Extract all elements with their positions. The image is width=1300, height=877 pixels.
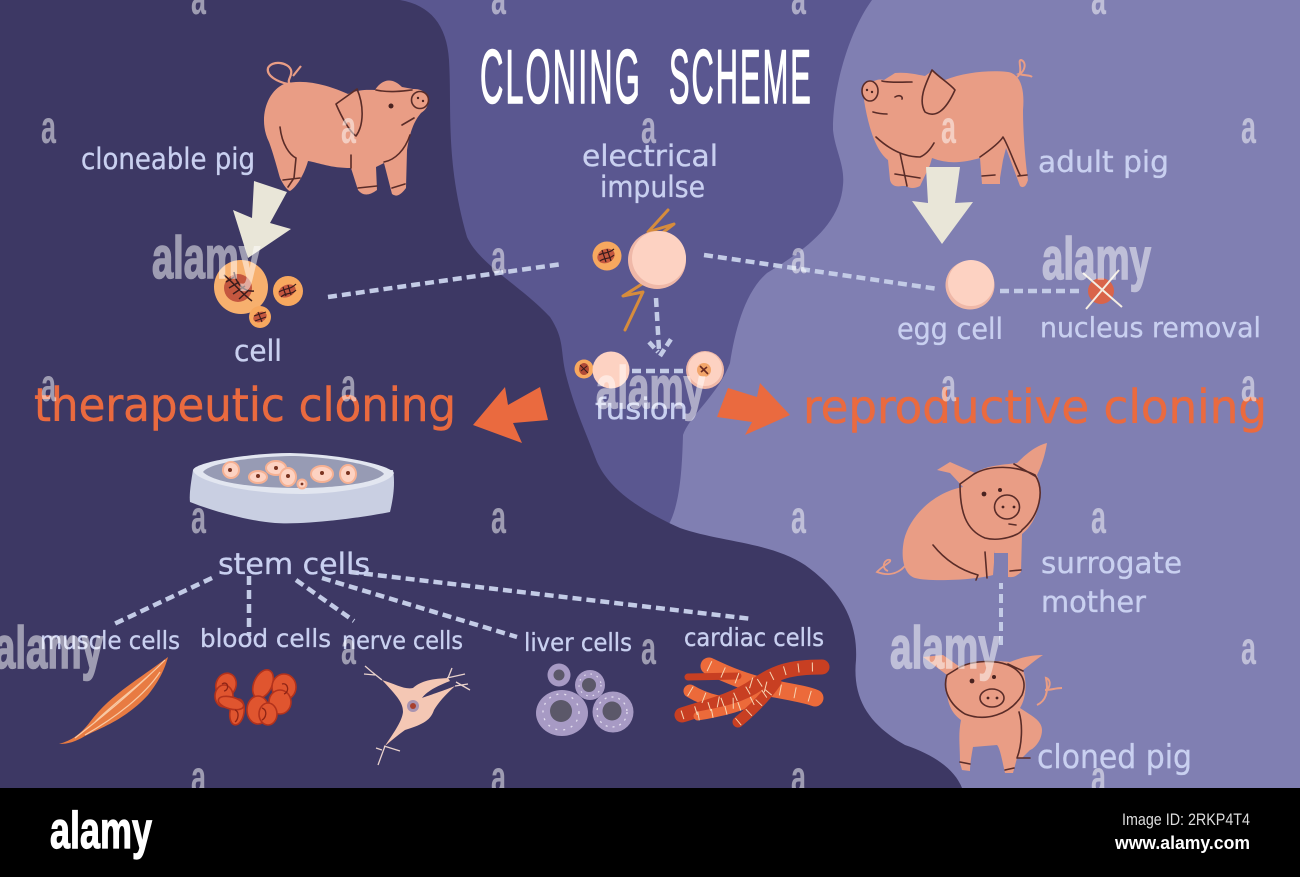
dashed connector: cell to impulse bbox=[328, 264, 562, 297]
watermark: small repeated marks: a bbox=[1241, 359, 1256, 411]
watermark: small repeated marks: a bbox=[791, 751, 806, 803]
icon: muscle cell bbox=[59, 657, 168, 744]
arrow: to reproductive cloning bbox=[717, 383, 790, 435]
background: dark left panel bbox=[0, 0, 962, 788]
footer url: www.alamy.com bbox=[1114, 833, 1250, 853]
icon: nerve cell bbox=[364, 666, 470, 765]
label: muscle cells: muscle cells bbox=[40, 626, 180, 655]
footer bar bbox=[0, 788, 1300, 877]
arrow: adult pig to egg cell bbox=[912, 167, 973, 244]
footer logo: alamy bbox=[50, 802, 152, 860]
dashed connectors: stem cells branches bbox=[112, 572, 752, 637]
icon: electrical bolt bbox=[623, 210, 674, 330]
dashed arrow: impulse to fusion bbox=[649, 298, 673, 356]
watermark: small repeated marks: a bbox=[41, 101, 56, 153]
icon: large egg cell bbox=[628, 231, 686, 289]
label: nucleus removal: nucleus removal bbox=[1040, 311, 1261, 344]
title bbox=[480, 35, 813, 120]
label: blood cells: blood cells bbox=[200, 624, 331, 653]
dashed connector: fusion cells bbox=[632, 369, 684, 373]
dashed connector: egg cell to nucleus bbox=[1000, 289, 1082, 293]
watermark: small repeated marks: a bbox=[1241, 622, 1256, 674]
icon: fusion cells bbox=[574, 351, 724, 389]
icon: nucleus removal bbox=[1083, 270, 1122, 309]
watermark: small repeated marks: a bbox=[191, 491, 206, 543]
watermark: small repeated marks: a bbox=[41, 359, 56, 411]
watermark: small repeated marks: a bbox=[791, 491, 806, 543]
watermark: small repeated marks: a bbox=[941, 101, 956, 153]
icon: nucleus cell beside impulse bbox=[592, 242, 622, 270]
icon: cloned pig bbox=[923, 655, 1062, 773]
arrow: to therapeutic cloning bbox=[473, 387, 548, 443]
title: SCHEME bbox=[669, 36, 813, 120]
label: egg cell: egg cell bbox=[897, 312, 1003, 346]
icon: surrogate mother pig bbox=[877, 443, 1047, 583]
icon: liver cells bbox=[536, 664, 634, 736]
background: middle panel bbox=[400, 0, 872, 530]
arrow: pig to cell bbox=[233, 181, 291, 258]
label: adult pig: adult pig bbox=[1038, 145, 1169, 179]
watermark: small repeated marks: a bbox=[341, 101, 356, 153]
label: cloneable pig: cloneable pig bbox=[81, 142, 255, 176]
footer image id: Image ID: 2RKP4T4 bbox=[1122, 810, 1250, 829]
dashed connector: impulse to egg cell bbox=[704, 255, 938, 289]
watermark: small repeated marks: a bbox=[491, 231, 506, 283]
icon: cell cluster bbox=[214, 260, 303, 328]
watermark: large alamy marks: alamy bbox=[890, 615, 1000, 681]
icon: petri dish bbox=[190, 453, 394, 523]
heading: therapeutic cloning: therapeutic cloning bbox=[34, 378, 456, 432]
watermark: small repeated marks: a bbox=[1241, 101, 1256, 153]
label: surrogate mother: mother bbox=[1041, 585, 1146, 619]
watermark: small repeated marks: a bbox=[341, 359, 356, 411]
watermark: small repeated marks: a bbox=[491, 491, 506, 543]
icon: blood cells bbox=[212, 667, 296, 726]
watermark: large alamy marks: alamy bbox=[152, 225, 260, 291]
watermark: small repeated marks: a bbox=[191, 751, 206, 803]
icon: adult pig bbox=[862, 60, 1032, 188]
watermark: small repeated marks: a bbox=[491, 751, 506, 803]
watermark: small repeated marks: a bbox=[341, 622, 356, 674]
label: stem cells: stem cells bbox=[218, 547, 370, 581]
icon: cloneable pig bbox=[264, 63, 428, 196]
label: fusion: fusion bbox=[595, 392, 688, 426]
watermark: large alamy marks bbox=[0, 225, 1151, 681]
label: electrical: electrical bbox=[582, 139, 718, 173]
label: surrogate mother bbox=[1041, 546, 1182, 619]
label: cell: cell bbox=[234, 334, 282, 368]
watermark: small repeated marks: a bbox=[641, 622, 656, 674]
icon: egg cell bbox=[946, 260, 994, 310]
watermark: small repeated marks: a bbox=[641, 101, 656, 153]
watermark: small repeated marks: a bbox=[1091, 751, 1106, 803]
label: impulse: impulse bbox=[600, 170, 705, 204]
watermark: small repeated marks: a bbox=[1091, 491, 1106, 543]
watermark: small repeated marks: a bbox=[791, 231, 806, 283]
icon: cardiac cells bbox=[682, 666, 822, 722]
watermark: large alamy marks: alamy bbox=[596, 355, 705, 421]
label: cardiac cells: cardiac cells bbox=[684, 623, 824, 652]
label: surrogate mother: surrogate bbox=[1041, 546, 1182, 580]
dashed connector: surrogate to cloned pig bbox=[999, 580, 1003, 650]
watermark: small repeated marks: a bbox=[941, 359, 956, 411]
label: cloned pig: cloned pig bbox=[1037, 737, 1192, 776]
label: nerve cells: nerve cells bbox=[342, 626, 463, 655]
heading: reproductive cloning: reproductive cloning bbox=[803, 380, 1267, 434]
watermark: large alamy marks: alamy bbox=[1042, 226, 1151, 292]
title: CLONING bbox=[480, 35, 642, 120]
label: liver cells: liver cells bbox=[524, 628, 632, 657]
